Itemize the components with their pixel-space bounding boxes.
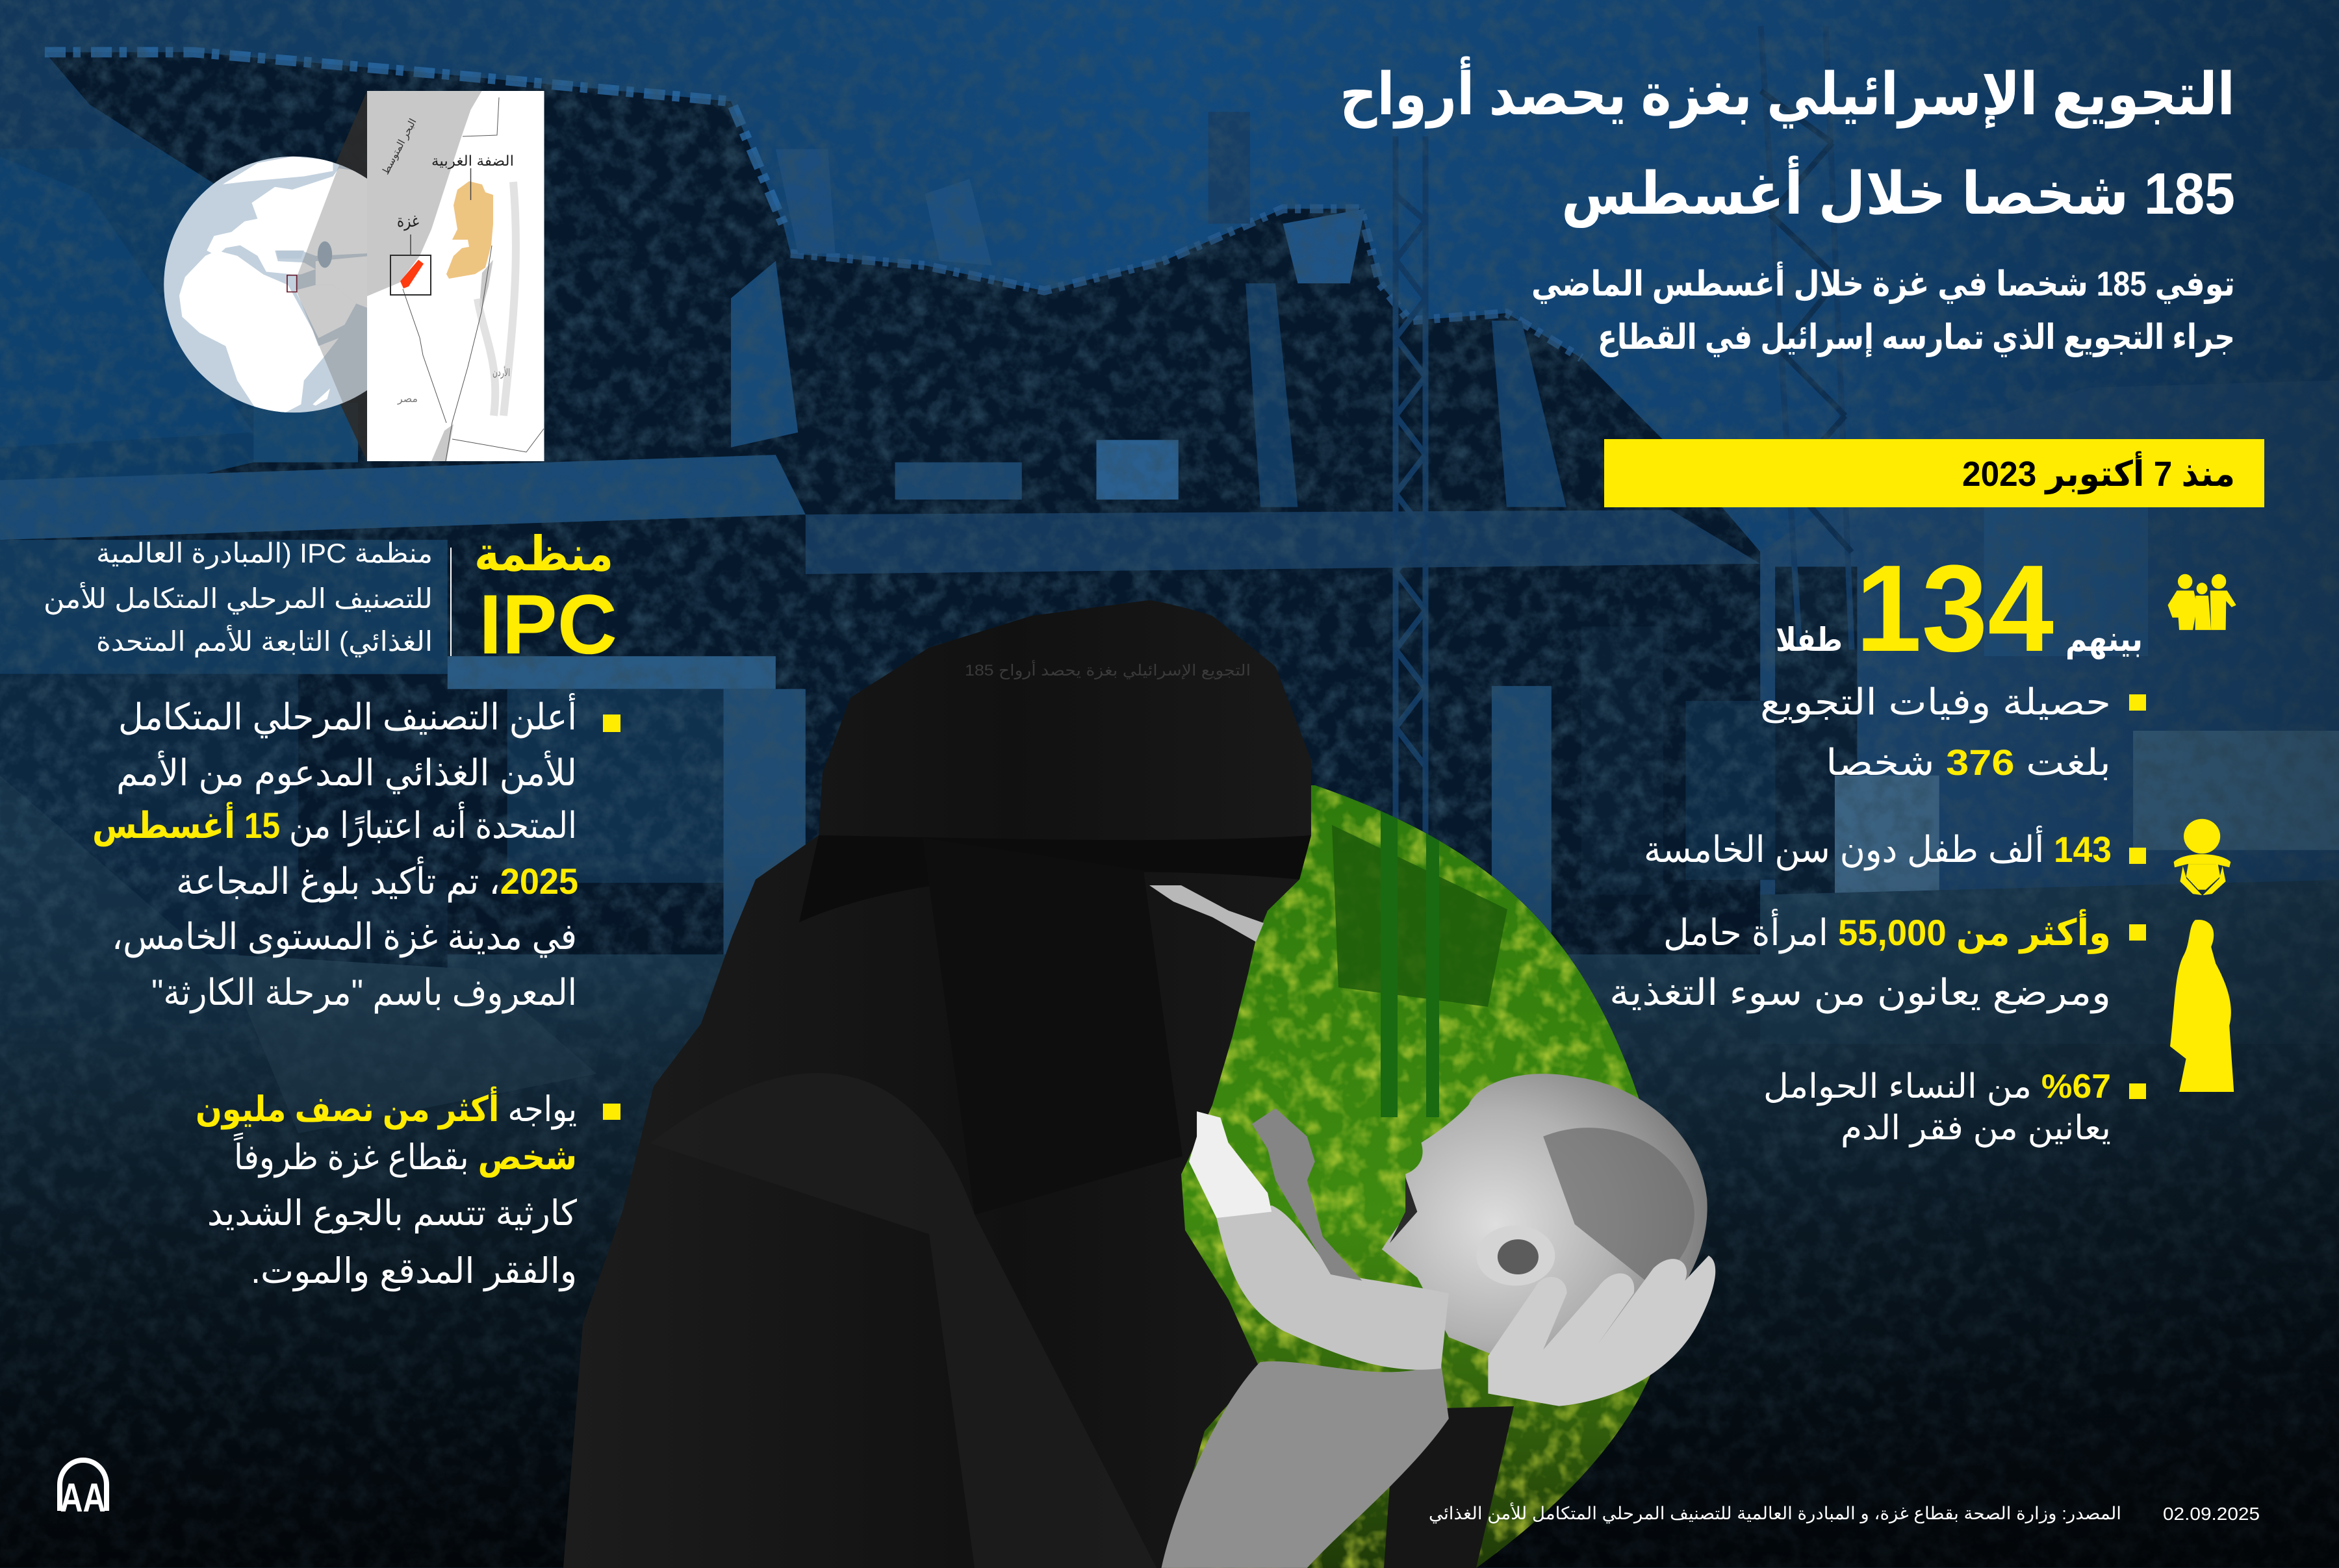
- map panel: مصر: [397, 394, 418, 405]
- stat: pregnant and nursing women: وأكثر من 55,000 امرأة حامل: [1663, 909, 2111, 954]
- eye: [1149, 885, 1264, 942]
- map panel: البحر المتوسط: [380, 117, 419, 177]
- IPC description: [44, 538, 452, 658]
- stat: total starvation deaths: حصيلة وفيات التجويع: [1760, 681, 2111, 724]
- icon: baby: [2174, 819, 2230, 895]
- malnourished baby held in a hand: [1162, 1074, 1715, 1568]
- stat: anaemia among pregnant women: [1763, 1068, 2146, 1148]
- big number: 134 children: 134: [1856, 540, 2054, 677]
- map panel: [367, 91, 544, 461]
- icon: family of children: [2168, 574, 2236, 630]
- map labels: الضفة الغربية: [431, 153, 514, 169]
- location inset: globe and map: [164, 91, 544, 461]
- supporting adult hand: [1488, 1256, 1715, 1406]
- IPC heading: IPC: [479, 577, 617, 672]
- left text: half a million facing hunger: شخص بقطاع غزة ظروفاً: [233, 1132, 577, 1178]
- left text: famine declaration: في مدينة غزة المستوى الخامس،: [112, 916, 577, 958]
- stat: total starvation deaths: [1760, 681, 2146, 783]
- west bank: [446, 181, 493, 279]
- inset marker on globe: [287, 275, 297, 292]
- left text: half a million facing hunger: [196, 1086, 620, 1292]
- big number: 134 children: [1776, 540, 2143, 677]
- stat: total starvation deaths: بلغت 376 شخصا: [1826, 742, 2111, 783]
- left text: half a million facing hunger: والفقر المدقع والموت.: [251, 1252, 577, 1292]
- left text: famine declaration: المعروف باسم "مرحلة الكارثة": [151, 972, 577, 1014]
- left text: half a million facing hunger: يواجه أكثر من نصف مليون: [196, 1086, 577, 1130]
- left text: famine declaration: أعلن التصنيف المرحلي المتكامل: [118, 693, 577, 739]
- IPC description: منظمة IPC (المبادرة العالمية: [96, 538, 433, 569]
- green circular photo panel behind the baby: [1163, 779, 1683, 1568]
- map panel: غزة: [397, 211, 419, 231]
- IPC heading: منظمة: [474, 527, 613, 581]
- stat: pregnant and nursing women: [1609, 909, 2146, 1014]
- source: المصدر: وزارة الصحة بقطاع غزة، و المبادرة العالمية للتصنيف المرحلي المتكامل للأمن الغذائي: [1429, 1502, 2121, 1524]
- head: [1382, 1074, 1707, 1375]
- left text: famine declaration: 2025، تم تأكيد بلوغ المجاعة: [176, 856, 578, 903]
- yellow date bar: [1604, 439, 2264, 507]
- IPC description: الغذائي) التابعة للأمم المتحدة: [96, 624, 433, 658]
- left text: famine declaration: المتحدة أنه اعتبارًا من 15 أغسطس: [92, 802, 577, 847]
- title: التجويع الإسرائيلي بغزة يحصد أرواح: [1340, 56, 2235, 129]
- gaza box: [390, 255, 431, 295]
- left text: famine declaration: للأمن الغذائي المدعوم من الأمم: [116, 750, 577, 794]
- faint caption on the veil: التجويع الإسرائيلي بغزة يحصد أرواح 185: [965, 660, 1251, 679]
- left text: half a million facing hunger: كارثية تتسم بالجوع الشديد: [207, 1194, 577, 1233]
- open mouth: [1390, 1177, 1417, 1243]
- logo: Anadolu Agency: AA: [60, 1476, 105, 1521]
- map panel: الأردن: [492, 366, 510, 379]
- gaza strip: [400, 260, 424, 288]
- statistics list: [1609, 681, 2146, 1148]
- icon: pregnant woman: [2170, 920, 2234, 1092]
- title: [1340, 56, 2235, 227]
- logo: Anadolu Agency: [60, 1460, 107, 1521]
- pole: [1396, 26, 1852, 1013]
- mediterranean sea: [367, 91, 482, 296]
- stat: pregnant and nursing women: ومرضع يعانون من سوء التغذية: [1609, 972, 2111, 1014]
- bandaged hand: [1189, 1111, 1272, 1218]
- date: 02.09.2025: [2163, 1504, 2260, 1524]
- big number: 134 children: بينهم: [2065, 620, 2143, 659]
- left text: famine declaration: [92, 693, 620, 1014]
- yellow date bar: منذ 7 أكتوبر 2023: [1962, 451, 2235, 494]
- big number: 134 children: طفلا: [1776, 622, 1843, 658]
- woman in black niqab: [563, 600, 1514, 1568]
- arm: [1216, 1206, 1449, 1370]
- torso: [1162, 1361, 1449, 1568]
- subtitle: [1531, 261, 2235, 357]
- stat: anaemia among pregnant women: %67 من النساء الحوامل: [1763, 1068, 2111, 1106]
- IPC heading: [474, 527, 617, 672]
- hair shading: [1543, 1128, 1694, 1287]
- IPC description: للتصنيف المرحلي المتكامل للأمن: [44, 581, 433, 615]
- zoom cone: [287, 91, 367, 461]
- ear: [1476, 1226, 1555, 1285]
- globe: [164, 91, 426, 461]
- subtitle: توفي 185 شخصا في غزة خلال أغسطس الماضي: [1531, 261, 2235, 304]
- free hand: [1252, 1108, 1362, 1281]
- title: 185 شخصا خلال أغسطس: [1561, 155, 2235, 227]
- stat: children under five: 143 ألف طفل دون سن الخامسة: [1644, 826, 2112, 871]
- stat: anaemia among pregnant women: يعانين من فقر الدم: [1841, 1109, 2111, 1148]
